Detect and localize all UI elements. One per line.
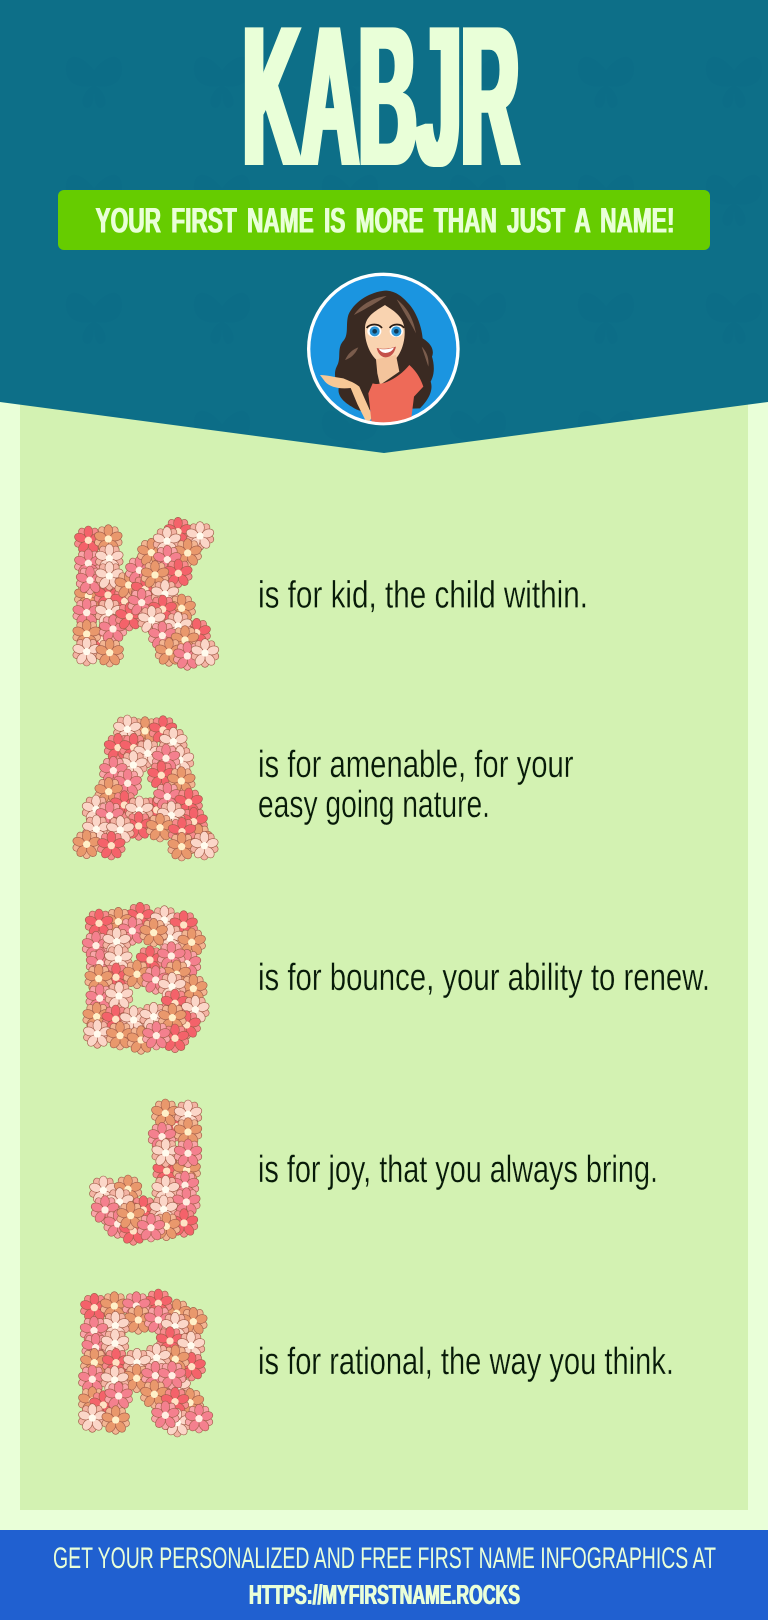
subtitle ribbon [58,190,710,250]
flower letter R [77,1289,214,1437]
text: A meaning [258,744,574,826]
header banner with chevron [0,0,768,453]
avatar: woman in circle [307,273,460,425]
flower letter B [81,902,210,1054]
flower letter K [72,517,220,670]
text: A meaning: easy going nature. [258,784,490,826]
footer bar: HTTPS://MYFIRSTNAME.ROCKS [249,1579,520,1610]
flower letter A [72,715,219,861]
flower letter J [88,1099,203,1245]
text: A meaning: is for amenable, for your [258,744,574,786]
content panel [20,380,748,1510]
text: K meaning: is for kid, the child within. [258,574,588,616]
footer bar [0,1530,768,1620]
